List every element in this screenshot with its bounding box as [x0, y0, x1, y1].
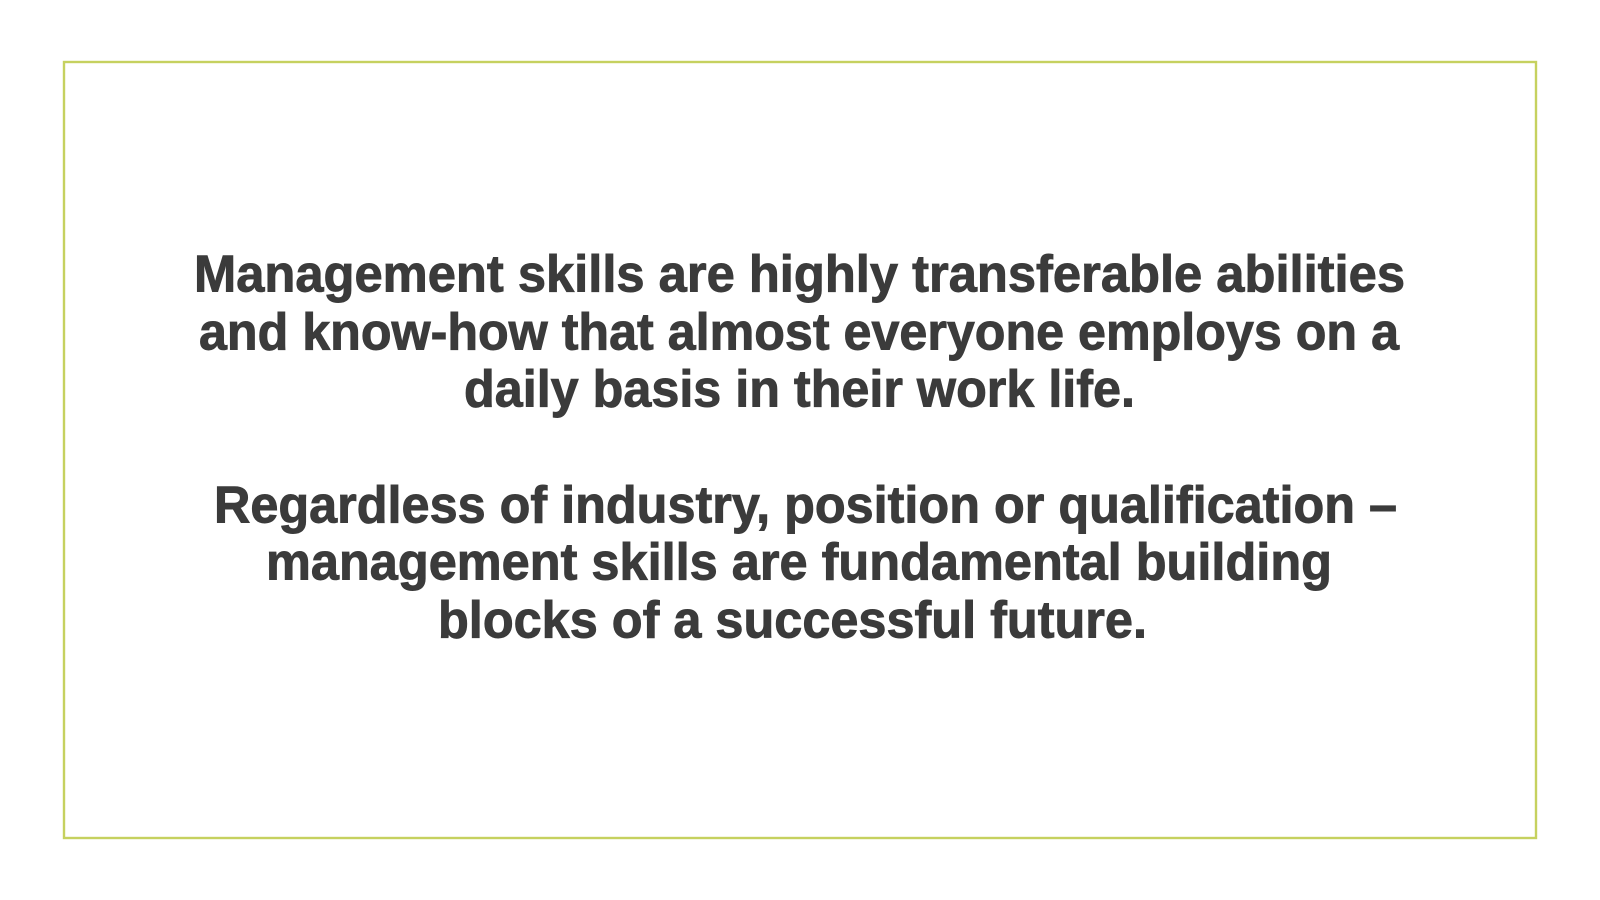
- text block: second paragraph: [214, 476, 1397, 650]
- text block: first paragraph: [194, 246, 1405, 418]
- frame: lime green border: [64, 62, 1536, 838]
- line 3: daily basis in their work life.: [464, 360, 1135, 418]
- line 1: Management skills are highly transferable abilities: [194, 246, 1405, 304]
- line 2: and know-how that almost everyone employs on a: [199, 304, 1400, 362]
- line 4: Regardless of industry, position or qualification –: [214, 476, 1397, 534]
- line 5: management skills are fundamental building: [266, 534, 1332, 592]
- line 6: blocks of a successful future.: [438, 592, 1147, 650]
